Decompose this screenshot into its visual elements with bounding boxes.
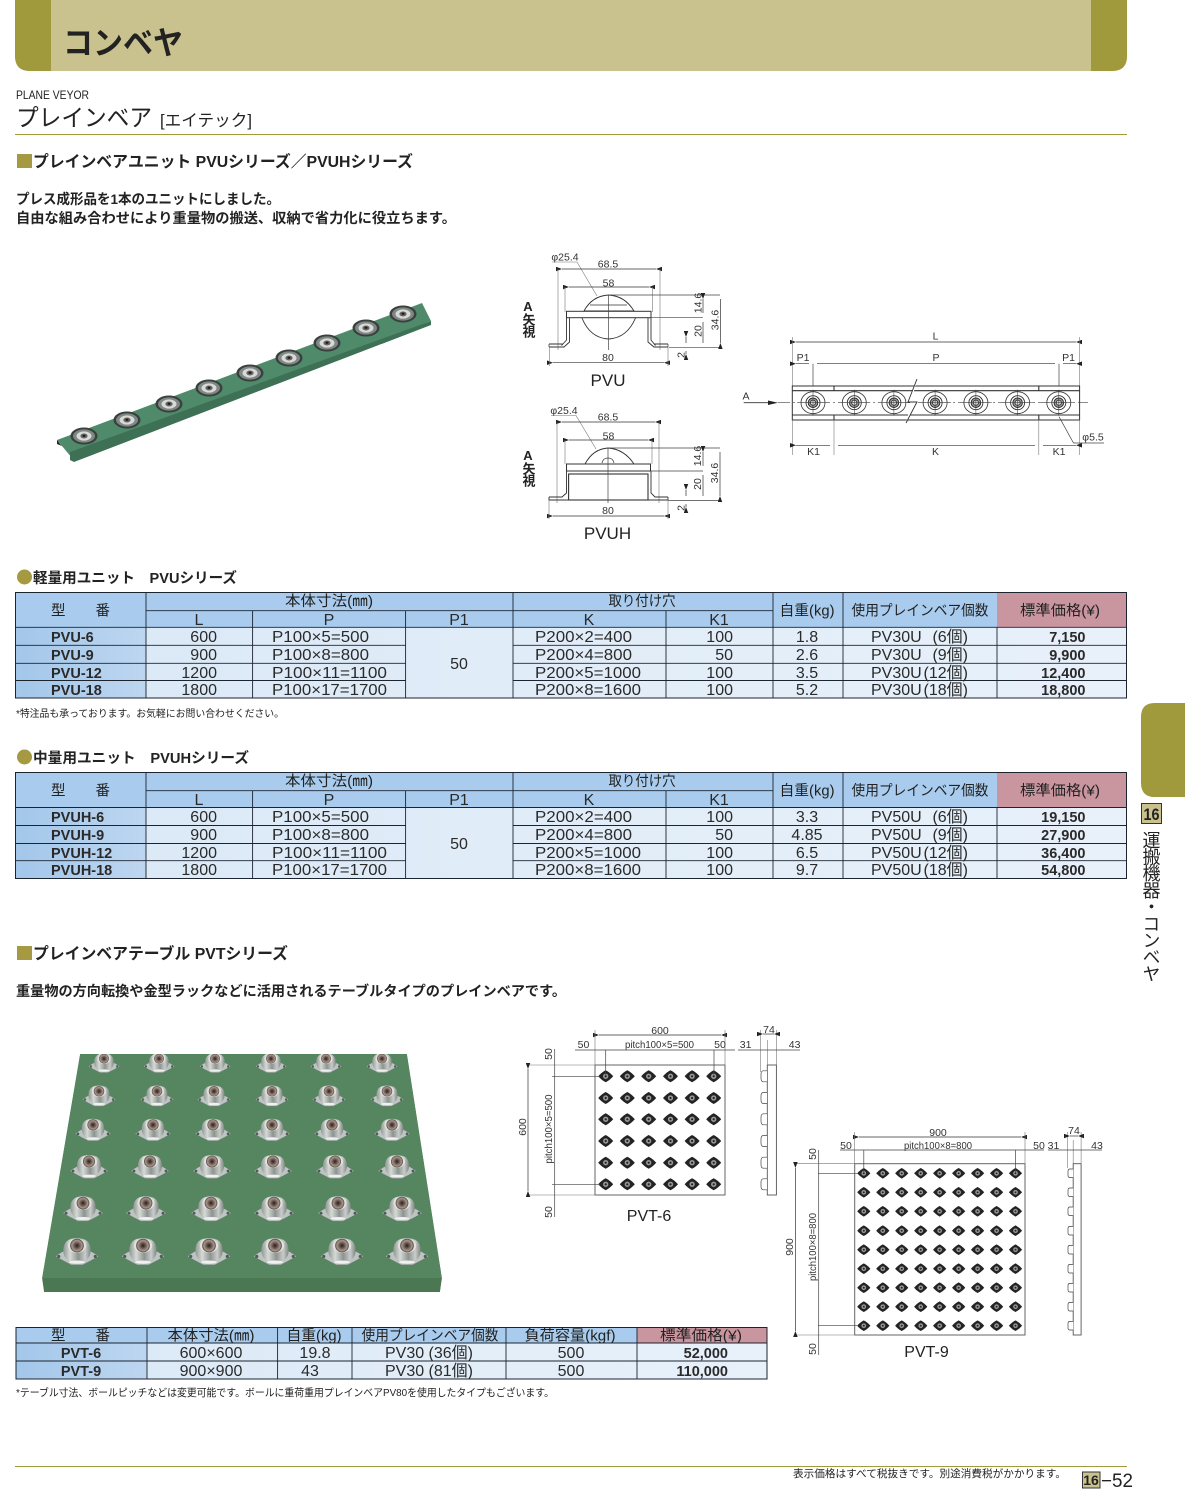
table header: 本体寸法(㎜)	[285, 773, 373, 790]
side view: 74	[763, 1024, 775, 1036]
table rows: 1800	[181, 862, 217, 879]
side view: 43	[1091, 1140, 1103, 1152]
table header: 負荷容量(kgf)	[524, 1328, 616, 1344]
table: PVU series	[16, 592, 1126, 699]
table rows: PVU-12	[51, 666, 102, 682]
table header: 取り付け穴	[608, 593, 676, 610]
table rows: 600	[190, 809, 217, 826]
sub heading: medium unit: 中量用ユニット PVUHシリーズ	[33, 749, 250, 767]
diagram: PVT-9: pitch100×8=800	[904, 1140, 972, 1152]
table rows: 50	[715, 647, 733, 664]
table rows: 50	[450, 656, 468, 673]
table rows	[51, 628, 1086, 699]
table rows: (12個)	[924, 664, 968, 682]
diagram: PVUH cross section: 34.6	[709, 463, 721, 483]
product name heading	[15, 88, 1127, 135]
label: PVT-9: PVT-9	[904, 1344, 949, 1361]
photo: PVT table	[42, 1053, 442, 1292]
table rows: (6個)	[932, 628, 968, 646]
table rows: 3.3	[796, 809, 818, 826]
table rows: P100×8=800	[272, 647, 369, 664]
side view: 74	[1068, 1125, 1080, 1137]
description: PVT series: 重量物の方向転換や金型ラックなどに活用されるテーブルタイプのプレインベアです。	[16, 983, 566, 999]
table rows: PVU-18	[51, 683, 102, 699]
section heading: PVU / PVUH: プレインベアユニット PVUシリーズ／PVUHシリーズ	[33, 152, 413, 171]
diagram: PVT-9: 50	[807, 1343, 819, 1355]
table rows: 9,900	[1049, 648, 1086, 664]
table rows: 100	[706, 809, 733, 826]
diagram: PVT-9: 50	[1033, 1140, 1045, 1152]
table header: 使用プレインベア個数	[362, 1328, 499, 1344]
table header: P	[324, 612, 334, 629]
table rows: 100	[706, 665, 733, 682]
diagram: unit plan view: K1	[1053, 446, 1066, 458]
diagram: PVUH cross section: 20	[692, 478, 704, 490]
table rows: P200×5=1000	[535, 665, 641, 682]
table rows: 100	[706, 862, 733, 879]
table rows: (9個)	[932, 826, 968, 844]
table header: 本体寸法(㎜)	[285, 593, 373, 610]
diagram: unit plan view: P1	[797, 352, 810, 364]
label: PVT-6: PVT-6	[627, 1208, 671, 1225]
table rows: 43	[301, 1363, 319, 1380]
table rows: 12,400	[1041, 666, 1086, 682]
title: コンベヤ	[63, 25, 183, 61]
description: PVU series: 自由な組み合わせにより重量物の搬送、収納で省力化に役立ちます。	[16, 210, 456, 226]
table header: K	[584, 792, 595, 809]
table header: 型 番	[51, 602, 110, 620]
diagram: PVT-9: 50	[840, 1140, 852, 1152]
sub heading: light unit: 軽量用ユニット PVUシリーズ	[33, 569, 237, 587]
table rows: P100×17=1700	[272, 682, 387, 699]
table rows: 36,400	[1041, 846, 1086, 862]
diagram: PVT-9: 900	[784, 1238, 796, 1256]
table rows: PVUH-12	[51, 846, 112, 862]
table rows: P100×11=1100	[272, 665, 387, 682]
table header: 標準価格(¥)	[1020, 602, 1100, 620]
table rows: P200×2=400	[535, 809, 632, 826]
table rows: PVT-6	[61, 1346, 101, 1362]
table rows: PV30U	[871, 682, 922, 699]
table rows: P100×5=500	[272, 629, 369, 646]
table rows: 3.5	[796, 665, 818, 682]
table header: 自重(kg)	[286, 1328, 342, 1344]
table rows: 4.85	[791, 827, 823, 844]
table header: 本体寸法(㎜)	[168, 1328, 254, 1344]
diagram: PVU cross section: 14.6	[692, 293, 704, 313]
table header: 使用プレインベア個数	[852, 602, 989, 620]
table rows: P100×17=1700	[272, 862, 387, 879]
table rows: P100×5=500	[272, 809, 369, 826]
header band	[15, 0, 1127, 71]
diagram: unit plan view: K	[932, 446, 939, 458]
diagram: PVUH cross section: 2	[676, 505, 688, 511]
table rows: PV30U	[871, 665, 922, 682]
diagram: unit plan view: P1	[1062, 352, 1075, 364]
table rows: (9個)	[932, 646, 968, 664]
diagram: PVT-9	[784, 1125, 1103, 1355]
diagram: PVT-9: 50	[807, 1148, 819, 1160]
table header: 自重(kg)	[780, 782, 834, 800]
table rows: P200×5=1000	[535, 845, 641, 862]
product name heading: プレインベア	[16, 105, 152, 132]
description: PVU series	[16, 191, 456, 226]
table rows: 900	[190, 827, 217, 844]
page number: 16	[1083, 1472, 1099, 1488]
table rows: 50	[450, 836, 468, 853]
table header: 取り付け穴	[608, 773, 676, 790]
table header	[51, 773, 1100, 809]
diagram: unit plan view: φ5.5	[1082, 432, 1104, 444]
table header: K1	[709, 612, 729, 629]
table rows: 5.2	[796, 682, 818, 699]
diagram: unit plan view: L	[933, 330, 939, 342]
diagram: PVUH cross section: 80	[602, 505, 614, 517]
diagram: PVT-6: 50	[543, 1048, 555, 1060]
table rows: (12個)	[924, 844, 968, 862]
side view	[738, 1024, 801, 1195]
table header: P1	[449, 612, 469, 629]
table rows: PVU-9	[51, 648, 94, 664]
table header: L	[195, 612, 204, 629]
table rows: 100	[706, 629, 733, 646]
table rows: 100	[706, 682, 733, 699]
page number	[1082, 1471, 1133, 1492]
page number: −52	[1101, 1471, 1133, 1492]
table rows: P200×4=800	[535, 827, 632, 844]
table rows: P200×8=1600	[535, 682, 641, 699]
table rows: PV50U	[871, 827, 922, 844]
side view	[1048, 1125, 1103, 1335]
footer: 表示価格はすべて税抜きです。別途消費税がかかります。	[793, 1467, 1066, 1480]
table header: K	[584, 612, 595, 629]
table header: 型 番	[51, 782, 110, 800]
table header: 標準価格(¥)	[660, 1328, 742, 1344]
table rows: 2.6	[796, 647, 818, 664]
diagram: PVU cross section: 2	[676, 352, 688, 358]
table: PVUH series	[16, 772, 1126, 879]
section heading: PVT: プレインベアテーブル PVTシリーズ	[33, 944, 288, 963]
diagram: PVU cross section: 58	[603, 278, 614, 290]
description: PVU series: プレス成形品を1本のユニットにしました。	[16, 191, 280, 207]
side view: 31	[1048, 1140, 1059, 1152]
table rows: PV30U	[871, 629, 922, 646]
table rows: 600	[190, 629, 217, 646]
side view: 31	[740, 1039, 752, 1051]
diagram: PVUH cross section: 68.5	[598, 412, 618, 424]
diagram: PVT-6: pitch100×5=500	[543, 1094, 555, 1164]
table rows: P100×11=1100	[272, 845, 387, 862]
diagram: PVU cross section: 34.6	[710, 310, 722, 330]
label: PVU: PVU	[591, 371, 625, 390]
table rows: 54,800	[1041, 863, 1086, 879]
diagram: PVT-9: pitch100×8=800	[807, 1213, 819, 1281]
footer	[15, 1466, 1133, 1492]
table rows: 1.8	[796, 629, 818, 646]
table rows: 500	[558, 1363, 584, 1380]
diagram: unit plan view: K1	[807, 446, 820, 458]
table header: P	[324, 792, 334, 809]
table rows: P200×2=400	[535, 629, 632, 646]
diagram: PVT-6: 50	[714, 1039, 726, 1051]
diagram: PVT-6: pitch100×5=500	[625, 1039, 694, 1051]
table rows: 1800	[181, 682, 217, 699]
table rows: 9.7	[796, 862, 818, 879]
chapter number: 16	[1144, 805, 1160, 824]
table rows: 1200	[181, 665, 217, 682]
table rows: 110,000	[676, 1364, 728, 1380]
table rows: 100	[706, 845, 733, 862]
diagram: PVUH cross section: 58	[603, 430, 614, 442]
table rows: PV30 (81個)	[385, 1362, 473, 1380]
product name heading: PLANE VEYOR	[16, 88, 89, 102]
table rows: (18個)	[924, 681, 968, 699]
side view: 43	[789, 1039, 801, 1051]
table header: 標準価格(¥)	[1020, 782, 1100, 800]
table rows: PV30U	[871, 647, 922, 664]
table rows: 900×900	[180, 1363, 242, 1380]
table rows: PVT-9	[61, 1364, 101, 1380]
product name heading: [エイテック]	[160, 111, 252, 130]
table header: K1	[709, 792, 729, 809]
table rows: PV50U	[871, 862, 922, 879]
table rows: 50	[715, 827, 733, 844]
table rows: 27,900	[1041, 828, 1086, 844]
table rows: 600×600	[180, 1345, 242, 1362]
table rows: PVUH-9	[51, 828, 104, 844]
table rows: 19,150	[1041, 810, 1086, 826]
photo: PVU unit bar	[57, 303, 431, 462]
note: special orders: *特注品も承っております。お気軽にお問い合わせください。	[16, 707, 284, 720]
diagram: unit plan view: A	[742, 390, 750, 402]
diagram: unit plan view	[742, 330, 1104, 458]
diagram: PVU cross section: φ25.4	[551, 252, 579, 264]
label: A view PVU: A矢視	[520, 299, 536, 339]
table header: 型 番	[51, 1328, 110, 1344]
table rows: P200×4=800	[535, 647, 632, 664]
diagram: PVT-6: 600	[517, 1118, 529, 1136]
side tab	[1140, 703, 1185, 981]
diagram: PVUH cross section: 14.6	[692, 446, 704, 466]
table rows: 1200	[181, 845, 217, 862]
table rows: PVU-6	[51, 630, 94, 646]
table rows: 19.8	[299, 1345, 331, 1362]
table header: 使用プレインベア個数	[852, 782, 989, 800]
diagram: PVU cross section	[549, 252, 722, 366]
table rows: PV50U	[871, 809, 922, 826]
table rows: PV30 (36個)	[385, 1344, 473, 1362]
table rows: 900	[190, 647, 217, 664]
table header: P1	[449, 792, 469, 809]
note: table options: *テーブル寸法、ボールピッチなどは変更可能です。ボールに重荷重用プレインベアPV80を使用したタイプもございます。	[16, 1386, 554, 1399]
table rows: PVUH-18	[51, 863, 112, 879]
diagram: PVU cross section: 80	[602, 352, 614, 364]
diagram: PVT-6: 50	[543, 1206, 555, 1218]
table rows: PVUH-6	[51, 810, 104, 826]
diagram: PVUH cross section: φ25.4	[550, 405, 578, 417]
table rows: P200×8=1600	[535, 862, 641, 879]
label: PVUH: PVUH	[584, 524, 631, 543]
chapter label: 運搬機器・コンベヤ	[1140, 831, 1160, 981]
diagram: PVT-6: 50	[578, 1039, 589, 1051]
table header	[51, 1328, 742, 1344]
table rows: (18個)	[924, 861, 968, 879]
table header: 自重(kg)	[780, 602, 834, 620]
diagram: PVU cross section: 20	[692, 325, 704, 337]
label: A view PVUH: A矢視	[520, 448, 536, 488]
diagram: PVT-9: 900	[929, 1127, 947, 1139]
table header	[51, 593, 1100, 629]
table rows: P100×8=800	[272, 827, 369, 844]
table rows: 7,150	[1049, 630, 1086, 646]
table rows: (6個)	[932, 808, 968, 826]
table rows: 6.5	[796, 845, 818, 862]
diagram: PVT-6: 600	[651, 1025, 669, 1037]
table rows: 500	[558, 1345, 584, 1362]
diagram: PVT-6	[517, 1024, 801, 1218]
diagram: unit plan view: P	[932, 352, 940, 364]
table rows	[51, 808, 1086, 879]
table: PVT series	[16, 1328, 767, 1380]
table rows: 52,000	[684, 1346, 728, 1362]
table rows: 18,800	[1041, 683, 1086, 699]
diagram: PVUH cross section	[549, 405, 721, 519]
table header: L	[195, 792, 204, 809]
table rows: PV50U	[871, 845, 922, 862]
table rows	[61, 1344, 728, 1380]
diagram: PVU cross section: 68.5	[598, 258, 618, 270]
